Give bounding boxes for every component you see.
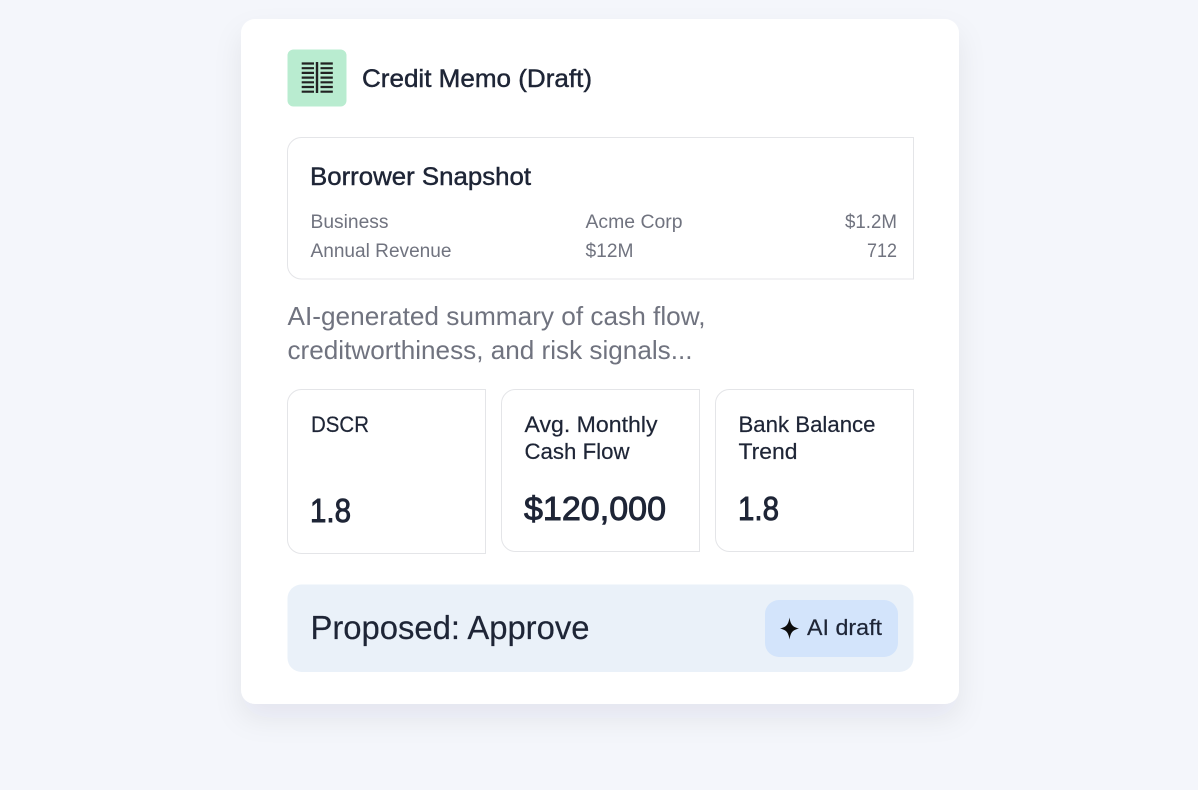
panel: dscr metric bbox=[288, 390, 486, 554]
text: ai summary: creditworthiness, and risk signals... bbox=[288, 335, 692, 365]
panel: avg monthly cash flow metric bbox=[502, 390, 700, 552]
title: Credit Memo (Draft) bbox=[362, 65, 592, 93]
text: ai summary: AI-generated summary of cash flow, bbox=[288, 301, 706, 331]
value: revenue: $12M bbox=[586, 241, 634, 262]
label: business: Business bbox=[310, 212, 388, 233]
panel: avg monthly cash flow metric: Cash Flow bbox=[524, 439, 630, 464]
panel: borrower snapshot bbox=[288, 138, 914, 279]
badge: ai draft: AI draft bbox=[807, 615, 882, 640]
icon: memo document bbox=[288, 50, 346, 106]
panel: bank balance trend metric bbox=[716, 390, 914, 552]
panel: avg monthly cash flow metric: $120,000 bbox=[524, 490, 666, 527]
panel: bank balance trend metric: 1.8 bbox=[738, 490, 779, 527]
panel: bank balance trend metric: Trend bbox=[738, 439, 798, 464]
panel: bank balance trend metric: Bank Balance bbox=[738, 412, 876, 437]
panel: credit memo card bbox=[241, 19, 959, 704]
panel: dscr metric: 1.8 bbox=[310, 492, 351, 529]
label: annual revenue: Annual Revenue bbox=[310, 241, 452, 262]
value: score: 712 bbox=[867, 241, 897, 262]
heading: borrower snapshot: Borrower Snapshot bbox=[310, 163, 531, 191]
value: acme corp: Acme Corp bbox=[586, 212, 682, 233]
panel: proposal banner bbox=[288, 584, 914, 672]
text: ai summary bbox=[288, 301, 706, 365]
text: proposed approve: Proposed: Approve bbox=[310, 609, 590, 646]
value: loan amount: $1.2M bbox=[845, 212, 897, 233]
panel: dscr metric: DSCR bbox=[311, 412, 369, 437]
badge: ai draft bbox=[765, 600, 898, 657]
icon: sparkle bbox=[780, 618, 799, 640]
panel: avg monthly cash flow metric: Avg. Monthly bbox=[524, 412, 658, 437]
